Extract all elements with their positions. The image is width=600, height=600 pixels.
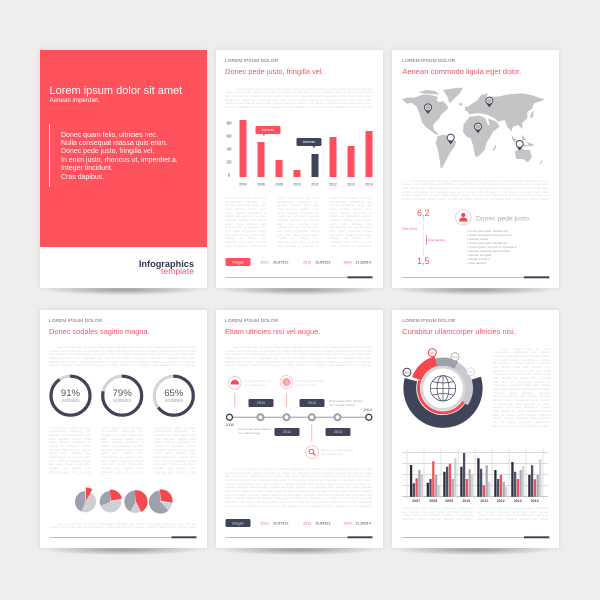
- panel: radial chart page: [392, 310, 559, 548]
- year box 2011: [274, 428, 299, 436]
- x axis labels: [239, 183, 372, 187]
- heading: Curabitur ullamcorper ultricies nisi.: [402, 326, 516, 336]
- world map: [402, 88, 545, 168]
- stats row: 20,97912: [272, 260, 288, 264]
- timeline note 3: nec, Aenean massa.: [329, 403, 355, 407]
- cover brand: Infographics template: template: [161, 266, 194, 276]
- x axis labels: 2013: [347, 183, 354, 187]
- timeline note 5: Donec quam felis, ultricies: [321, 448, 354, 452]
- stats row: 19,64323: [314, 260, 330, 264]
- icon: target: [280, 376, 292, 407]
- callout: dark: Aenean: [302, 140, 315, 144]
- cover text block: Donec pede justo, fringilla vel.: [61, 148, 154, 155]
- bullets: [466, 231, 469, 264]
- donut: 79%: [102, 376, 141, 415]
- stats row: 19,64323: [314, 521, 330, 525]
- kicker: LOREM IPSUM DOLOR: [402, 59, 455, 64]
- donut: 91%: sodales: [61, 398, 80, 404]
- timeline note 5: [321, 448, 354, 456]
- timeline note 4: Donec quam felis, ultricies: [238, 427, 271, 431]
- bullet list: In enim justo, rhoncus ut, imperdiet a.: [469, 245, 517, 249]
- timeline: 2008: [225, 423, 233, 427]
- right column paragraph: Lorem ipsum dolor sit amet, consectetuer adipiscing elit. Aenean commodo ligula eget dolor. Aenean massa. Cum sociis natoque penatibus et magnis dis parturient montes, nascetur ridiculus mus. Donec quam felis, ultricies nec, pellentesque eu, pretium quis, sem. Nulla consequat massa quis enim. Donec pede justo, fringilla vel, aliquet nec, vulputate eget, arcu. In enim justo, rhoncus ut, imperdiet a, venenatis vitae, justo. Nullam dictum felis eu pede mollis pretium. Integer tincidunt. Cras dapibus. Vivamus elementum semper nisi. Aenean vulputate eleifend tellus. Aenean leo ligula, porttitor eu, consequat vitae, eleifend ac, enim. Aliquam lorem ante, dapibus in, viverra quis, feugiat a, tellus. Phasellus viverra nulla ut metus varius laoreet. Quisque rutrum. Aenean imperdiet. Etiam ultricies nisi vel augue. Curabitur ullamcorper ultricies nisi. Nam eget dui. Etiam rhoncus.: [493, 348, 551, 428]
- donut: 91%: 91%: [60, 388, 80, 399]
- pie 4: [152, 494, 168, 510]
- timeline note 4: nec, pellentesque: [238, 431, 260, 435]
- bullet list: Aenean leo ligula.: [469, 253, 492, 257]
- bullet list: Donec pede justo, fringilla vel.: [469, 241, 508, 245]
- timeline note 1: [244, 379, 271, 387]
- year box 2012: 2012: [307, 401, 316, 405]
- panel: cover page: [40, 50, 206, 288]
- timeline note 3: Donec quam felis, ultricies: [329, 399, 363, 403]
- icon: globe: [430, 376, 456, 401]
- grouped bar chart: 2011: [480, 499, 488, 503]
- kicker: LOREM IPSUM DOLOR: [225, 319, 278, 324]
- timeline note 2: quis enim. Donec: [295, 383, 317, 387]
- year box 2013: 2013: [333, 430, 342, 434]
- panel: timeline page: [216, 310, 382, 548]
- bars: [239, 120, 372, 177]
- grouped bar chart: 2008: [429, 499, 437, 503]
- stats row: 2014: [343, 260, 351, 264]
- bubble: mid gray: 15%: [452, 355, 458, 359]
- range chart: 6,2: [417, 208, 430, 218]
- cover text block: Integer tincidunt.: [61, 165, 113, 172]
- x axis labels: 2010: [293, 183, 300, 187]
- x axis labels: 2004: [239, 183, 246, 187]
- bubble: red: 35%: [430, 351, 436, 355]
- range chart: 1,5: [417, 256, 430, 266]
- cover brand: Infographics template: [139, 259, 194, 276]
- grouped bar chart: 2012: [497, 499, 505, 503]
- bullet list: Aenean vulputate eleifend tellus.: [469, 249, 511, 253]
- cover text block: [61, 132, 178, 181]
- bubble: red: [428, 349, 436, 357]
- x axis labels: 2014: [365, 183, 372, 187]
- cover text block: Nulla consequat massa quis enim.: [61, 140, 168, 147]
- y axis labels: 20: [226, 159, 231, 164]
- map pin: Australia: [516, 140, 524, 151]
- cover vertical rule: [49, 124, 50, 187]
- icon: dome: [228, 376, 241, 407]
- stats row: Integer: [232, 260, 244, 264]
- callout: dark: [296, 138, 321, 148]
- year box 2010: [248, 399, 273, 407]
- timeline note 4: [238, 427, 271, 435]
- map pin: Russia: [485, 97, 493, 107]
- grouped bar chart: [402, 449, 548, 503]
- stats row: [225, 519, 370, 527]
- donut: 65%: [154, 376, 193, 415]
- bubble: light gray: [467, 368, 475, 376]
- timeline note 1: nec, pellentesque: [244, 383, 265, 387]
- map pin: South America: [447, 134, 455, 144]
- grouped bar chart: 2007: [412, 499, 420, 503]
- kicker: LOREM IPSUM DOLOR: [225, 59, 278, 64]
- cover text block: Cras dapibus.: [61, 174, 104, 181]
- callout: red: Aenean: [261, 128, 274, 132]
- panel: bar chart page: [216, 50, 382, 288]
- timeline note 3: [329, 399, 363, 407]
- heading: Etiam ultricies nisi vel augue.: [225, 326, 320, 336]
- x axis labels: 2008: [275, 183, 282, 187]
- x axis labels: 2011: [311, 183, 318, 187]
- subheading: Donec pede justo.: [476, 215, 531, 222]
- cover subtitle: Aenean imperdiet.: [50, 97, 100, 104]
- bullet list: Cras dapibus.: [469, 261, 487, 265]
- bubble: dark: [403, 368, 411, 376]
- stats row: 2012: [260, 260, 268, 264]
- stats row: 2013: [302, 521, 311, 525]
- donut: 79%: sodales: [112, 398, 131, 404]
- radial chart: [402, 347, 484, 430]
- bullet list: Donec quam felis, ultricies nec.: [469, 229, 509, 233]
- year box 2013: [325, 428, 350, 436]
- stats row: 21,89014: [355, 260, 370, 264]
- callout: red: [255, 126, 280, 136]
- map pin: Africa: [474, 123, 482, 133]
- cover brand: Infographics template: Infographics: [139, 259, 194, 269]
- stats row: Integer: [232, 521, 244, 525]
- bubble: light gray: 20%: [468, 370, 474, 374]
- timeline note 1: Donec quam felis, ultri: [244, 379, 271, 383]
- range chart: Cras dapibus: [428, 238, 446, 242]
- grouped bar chart: 2010: [462, 499, 470, 503]
- grouped bar chart: 2009: [445, 499, 453, 503]
- donut: 65%: sodales: [164, 398, 183, 404]
- bullet list: Aenean massa.: [469, 237, 489, 241]
- y axis labels: 80: [226, 120, 231, 125]
- donut: 79%: 79%: [112, 388, 132, 399]
- bullet list: [469, 229, 517, 265]
- bubble: dark: 30%: [404, 370, 410, 374]
- pie 3: [127, 494, 143, 509]
- timeline note 2: Nulla consequat massa: [295, 379, 324, 383]
- map pin: North America: [424, 103, 432, 114]
- bullet list: Integer tincidunt.: [469, 257, 490, 261]
- panel: donut and pie page: [40, 310, 206, 548]
- year box 2011: 2011: [282, 430, 291, 434]
- cover red block: [40, 50, 206, 247]
- stats row: [225, 258, 370, 266]
- heading: Donec sodales sagittis magna.: [49, 326, 150, 336]
- timeline: [225, 408, 372, 427]
- cover text block: Donec quam felis, ultricies nec.: [61, 132, 158, 138]
- heading: Aenean commodo ligula eget dolor.: [402, 66, 521, 76]
- kicker: LOREM IPSUM DOLOR: [402, 319, 455, 324]
- year box 2010: 2010: [256, 401, 265, 405]
- icon: person: [456, 210, 471, 225]
- x axis labels: 2006: [257, 183, 264, 187]
- range chart: [402, 208, 446, 266]
- panel: world map page: [392, 50, 559, 288]
- stats row: 2013: [302, 260, 311, 264]
- year box 2012: [299, 399, 324, 407]
- timeline note 2: [295, 379, 324, 387]
- kicker: LOREM IPSUM DOLOR: [49, 319, 102, 324]
- range chart: Diam purus: [402, 226, 418, 230]
- stats row: 21,89014: [355, 521, 370, 525]
- donut: 91%: [50, 376, 90, 415]
- bullet list: Nulla consequat massa quis enim.: [469, 233, 513, 237]
- y axis labels: 60: [226, 133, 231, 138]
- cover title: Lorem ipsum dolor sit amet: [50, 85, 182, 97]
- cover text block: In enim justo, rhoncus ut, imperdiet a.: [61, 157, 178, 164]
- timeline: 2014: [363, 408, 372, 412]
- stats row: 20,97912: [272, 521, 288, 525]
- stats row: 2014: [343, 521, 351, 525]
- grouped bar chart: 2014: [531, 499, 539, 503]
- pie 1: [78, 493, 93, 509]
- bar chart: [226, 120, 373, 278]
- stats row: 2012: [260, 521, 268, 525]
- y axis labels: [226, 120, 231, 177]
- heading: Donec pede justo, fringilla vel.: [225, 66, 324, 76]
- grouped bar chart: 2013: [514, 499, 522, 503]
- pie 2: [103, 495, 117, 508]
- timeline note 5: nec, pellentesque: [321, 452, 343, 456]
- x axis labels: 2012: [329, 183, 336, 187]
- y axis labels: 40: [226, 146, 231, 151]
- bubble: mid gray: [451, 353, 459, 361]
- y axis labels: 0: [227, 172, 230, 177]
- donut: 65%: 65%: [164, 388, 183, 399]
- icon: magnifier: [305, 424, 318, 459]
